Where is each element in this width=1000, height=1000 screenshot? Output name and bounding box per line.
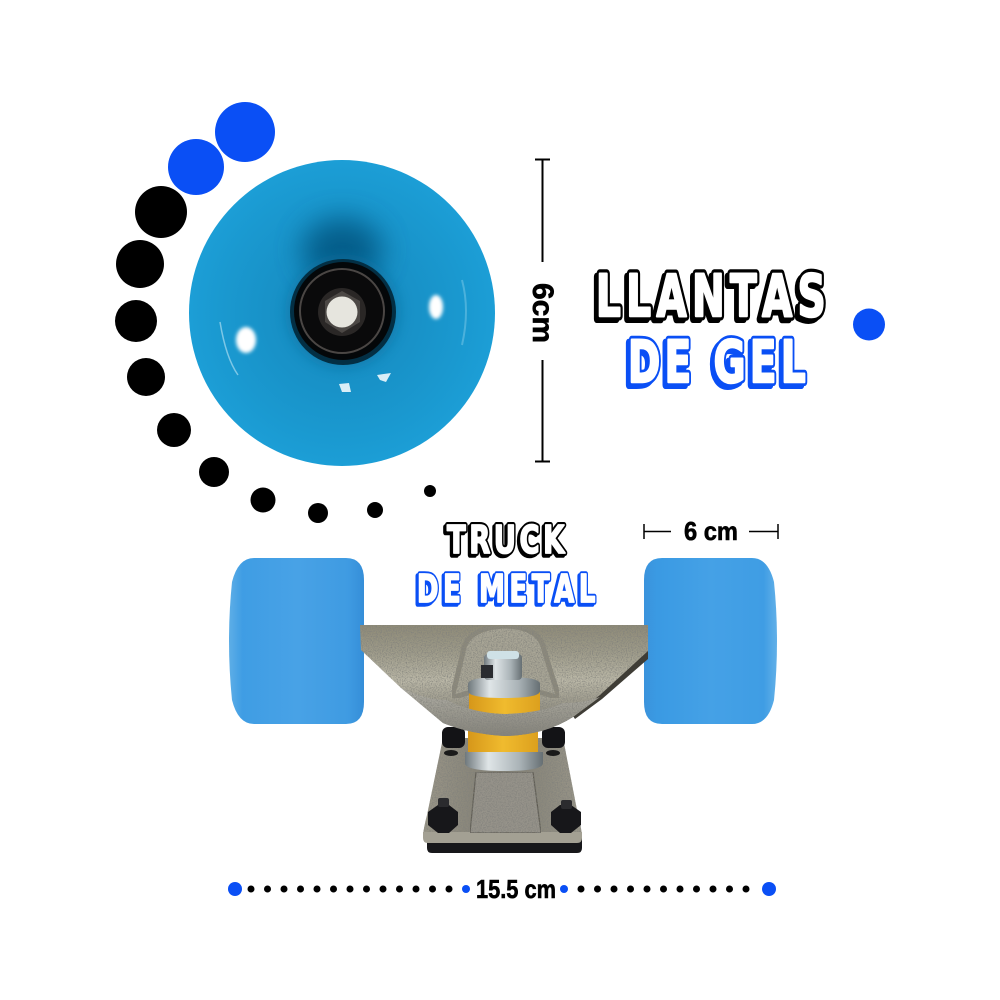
heading: de gel: DE GEL <box>625 331 807 399</box>
kingpin nut <box>481 651 522 680</box>
heading: de metal: DE METAL <box>417 567 600 611</box>
lower mounting bolts <box>428 798 581 833</box>
wheel front view <box>189 160 495 466</box>
wheel hub <box>290 259 396 365</box>
truck assembly <box>228 558 777 904</box>
heading: de metal: DE METAL <box>417 567 600 611</box>
lower bushing <box>465 725 543 771</box>
heading: llantas: LLANTAS <box>593 265 828 333</box>
title: truck de metal <box>415 517 600 613</box>
dimension: wheel width 6 cm: 6 cm <box>684 516 738 546</box>
heading: llantas: LLANTAS <box>596 262 831 330</box>
heading: de gel: DE GEL <box>628 328 810 396</box>
heading: de metal: DE METAL <box>415 569 598 613</box>
dimension: wheel height 6cm: 6cm <box>526 283 559 343</box>
hanger lower band <box>400 687 600 736</box>
blue accent dot <box>853 308 885 340</box>
right wheel <box>644 558 777 724</box>
upper mounting bolts <box>442 727 565 756</box>
heading: truck: TRUCK <box>447 517 568 562</box>
decorative dot arc <box>115 102 436 523</box>
dimension: truck width 15.5 cm: 15.5 cm <box>476 874 556 904</box>
dimension: wheel width 6 cm <box>644 516 778 546</box>
left wheel <box>229 558 364 724</box>
upper bushing and washer <box>468 677 540 718</box>
heading: llantas: LLANTAS <box>596 262 831 330</box>
heading: truck: TRUCK <box>445 519 566 564</box>
baseplate <box>423 738 582 853</box>
title: llantas de gel <box>593 262 831 399</box>
heading: truck: TRUCK <box>447 517 568 562</box>
hanger <box>360 625 648 736</box>
dimension: truck width 15.5 cm <box>228 874 776 904</box>
kingpin bracket <box>452 626 559 698</box>
wheel highlights <box>220 280 466 392</box>
dimension: wheel height 6cm <box>526 160 559 462</box>
heading: de gel: DE GEL <box>628 328 810 396</box>
